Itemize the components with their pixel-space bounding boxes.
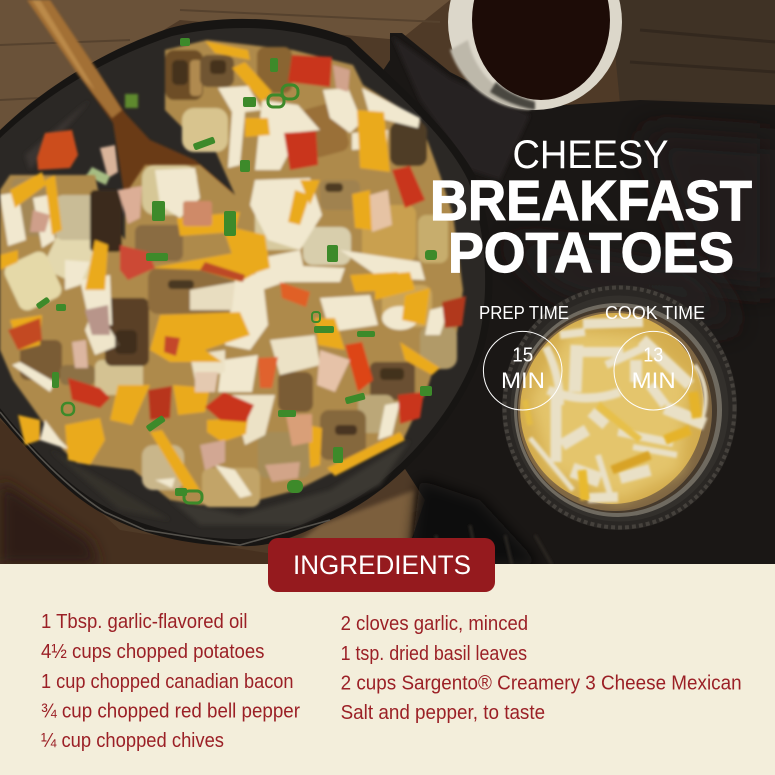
green chives: [36, 38, 437, 503]
prep time label: PREP TIME: [479, 302, 569, 323]
title line: POTATOES: POTATOES: [448, 221, 734, 285]
cook time unit: MIN: [632, 368, 676, 393]
prep time value: 15: [512, 344, 533, 367]
ingredients list: left column: ¼ cup chopped chives: [41, 729, 224, 752]
ingredients list: left column: ¾ cup chopped red bell pepper: [41, 700, 300, 722]
melted yellow cheddar: [0, 41, 440, 490]
food base: [0, 40, 463, 505]
ingredients heading: INGREDIENTS: [293, 550, 471, 580]
celery piece: [86, 167, 110, 185]
ingredients list: right column: 1 tsp. dried basil leaves: [341, 642, 527, 665]
wooden spoon: [27, 0, 235, 200]
char flecks: [115, 60, 404, 435]
ingredients list: left column: 1 cup chopped canadian bacon: [41, 670, 294, 693]
recipe title: [430, 133, 752, 285]
cook time label: COOK TIME: [605, 302, 705, 323]
chive slice: [125, 94, 138, 108]
dark cloth: [384, 33, 775, 564]
ingredients list: right column: 2 cups Sargento® Creamery 3 Cheese Mexican: [341, 672, 742, 694]
cook time block: [605, 302, 705, 410]
cook time value: 13: [643, 344, 663, 367]
title line: CHEESY: CHEESY: [512, 133, 668, 177]
potato and cheese filling: [0, 40, 466, 507]
melted white cheese: [0, 86, 450, 498]
ingredients list: left column: 1 Tbsp. garlic-flavored oil: [41, 610, 248, 633]
ingredients list: right column: 2 cloves garlic, minced: [341, 612, 528, 635]
chopped tomato on the pan: [37, 130, 78, 170]
ingredients list: left column: [41, 610, 300, 752]
food photograph: [0, 0, 775, 565]
ingredients list: left column: 4½ cups chopped potatoes: [41, 640, 264, 663]
ingredients panel background: [0, 564, 775, 775]
cast iron skillet: [0, 19, 492, 546]
ingredients list: right column: [341, 612, 742, 724]
coffee cup: [448, 0, 622, 110]
red peppers and ham: [8, 55, 466, 482]
prep time block: [479, 302, 569, 410]
ingredients heading badge: [268, 538, 495, 592]
wood table background: [0, 0, 775, 565]
cook time circle: [614, 331, 693, 410]
cheese shreds: [530, 322, 706, 500]
potatoes: [2, 47, 457, 507]
ham piece: [100, 145, 118, 178]
ingredients list: right column: Salt and pepper, to taste: [341, 701, 545, 724]
items resting on the pan: [37, 94, 138, 185]
prep time circle: [483, 331, 562, 410]
prep time unit: MIN: [501, 368, 545, 393]
title line: BREAKFAST: BREAKFAST: [430, 169, 752, 233]
bowl of shredded cheese: [502, 285, 737, 530]
